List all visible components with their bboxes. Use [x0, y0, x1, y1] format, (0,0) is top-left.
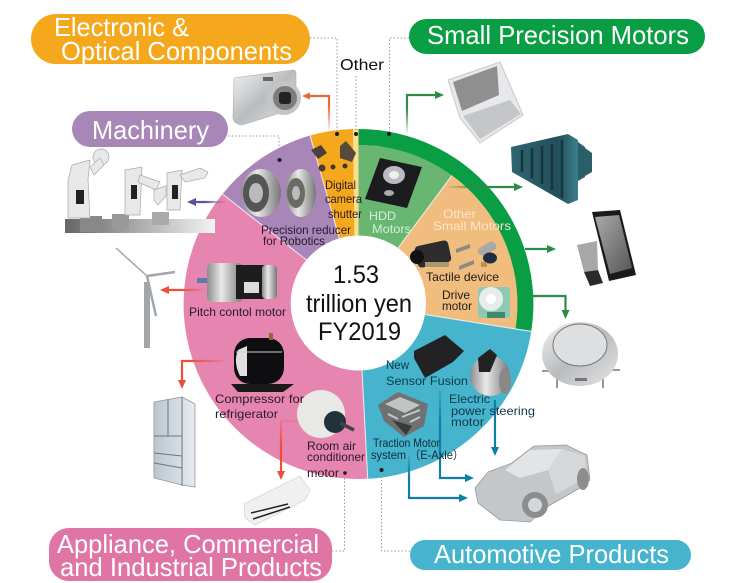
segment: machinery: [222, 136, 340, 260]
segment labels: Compressor for: [215, 392, 304, 406]
segment labels: HDD: [369, 209, 396, 223]
icon: digital camera shutter parts: [311, 141, 356, 172]
icon: robot arms on conveyor: [65, 149, 215, 233]
segment labels: camera: [325, 192, 362, 206]
icon: wind turbine: [116, 248, 175, 348]
arrow: laptop: [407, 91, 444, 133]
heading: machinery: [72, 111, 228, 147]
leader lines: [228, 38, 410, 551]
segment labels: Motors: [372, 222, 411, 236]
arrow: refrigerator: [178, 361, 225, 389]
heading: electronic and optical components: [31, 12, 310, 66]
arrow: servers: [448, 183, 523, 191]
leader dots: [278, 132, 391, 475]
segment labels: Sensor Fusion: [386, 374, 468, 388]
icon: refrigerator compressor: [231, 333, 294, 392]
heading: small precision motors: Small Precision Motors: [427, 20, 689, 50]
icon: pitch control motor: [197, 263, 277, 302]
segment: other: [353, 129, 358, 236]
segment labels: Other: [443, 207, 476, 221]
segment labels: Drive: [442, 288, 470, 302]
arrow: robot vacuum: [533, 296, 570, 319]
segment labels: power steering: [451, 404, 535, 418]
center total: FY2019: [318, 318, 401, 346]
segment labels: Digital: [325, 178, 356, 192]
segment labels: Pitch contol motor: [189, 305, 286, 319]
icon: electric power steering motor: [470, 349, 511, 396]
icon: server racks: [511, 134, 592, 204]
heading: electronic and optical components: Optical Components: [61, 36, 292, 66]
segment labels: Precision reducer: [261, 223, 351, 237]
segment: electronic and optical components: [310, 129, 354, 239]
segment labels: conditioner: [307, 450, 365, 464]
arrow: camera: [302, 92, 329, 130]
segment labels: [189, 178, 535, 480]
segment: automotive products: [362, 314, 531, 479]
segment labels: motor: [307, 466, 339, 480]
icon: air conditioner: [244, 476, 310, 525]
heading: appliance, commercial and industrial products: Appliance, Commercial: [57, 529, 319, 559]
heading: appliance, commercial and industrial products: [49, 528, 332, 582]
arrow: steering to car: [491, 400, 499, 456]
segment: appliance, commercial and industrial products: [184, 194, 368, 479]
center total: [306, 261, 412, 346]
segment: small precision motors ring: [358, 129, 533, 331]
segment labels: system （E-Axle）: [371, 448, 464, 462]
heading: automotive products: Automotive Products: [434, 539, 669, 569]
icon: hard disk drive: [365, 158, 422, 208]
label: other: Other: [340, 57, 385, 74]
segment: HDD motors: [358, 145, 452, 248]
icon: drive motor: [478, 287, 510, 318]
heading: electronic and optical components: Electronic &: [54, 12, 189, 42]
arrow: air conditioner: [277, 421, 297, 480]
icon: tactile devices: [410, 240, 497, 270]
arrow: sensor fusion to car: [440, 390, 474, 482]
icon: refrigerator: [154, 397, 195, 487]
segment: other small motors: [398, 175, 517, 329]
segment labels: refrigerator: [215, 407, 278, 421]
segment labels: New: [386, 358, 409, 372]
icon: robot vacuum: [542, 322, 620, 388]
arrow: wind turbine: [160, 286, 203, 294]
icon: digital camera: [233, 70, 301, 125]
arrow: traction motor to car: [409, 455, 468, 502]
arrow: robots: [187, 198, 225, 206]
segment labels: Room air: [307, 439, 356, 453]
heading: machinery: Machinery: [92, 115, 209, 145]
icon: laptop: [448, 62, 523, 143]
segment labels: for Robotics: [263, 234, 325, 248]
icon: smartphone and watch: [577, 210, 636, 286]
donut chart: [184, 129, 533, 479]
icon: traction motor system: [378, 392, 428, 437]
icon: car: [475, 445, 590, 522]
segment labels: shutter: [328, 207, 362, 221]
icon: precision reducers: [241, 169, 316, 217]
heading: appliance, commercial and industrial products: and Industrial Products: [60, 552, 322, 582]
segment labels: motor: [451, 415, 484, 429]
icon: room air conditioner motor: [297, 390, 354, 438]
center hole: [291, 236, 426, 370]
center total: trillion yen: [306, 290, 412, 318]
arrow: phone and watch: [525, 245, 556, 253]
segment labels: Small Motors: [433, 219, 511, 233]
segment labels: Electric: [449, 392, 490, 406]
center total: 1.53: [333, 261, 379, 289]
icon: new sensor fusion unit: [414, 335, 464, 378]
segment labels: Traction Motor: [373, 436, 440, 450]
segment labels: motor: [442, 299, 472, 313]
segment labels: Tactile device: [426, 270, 499, 284]
